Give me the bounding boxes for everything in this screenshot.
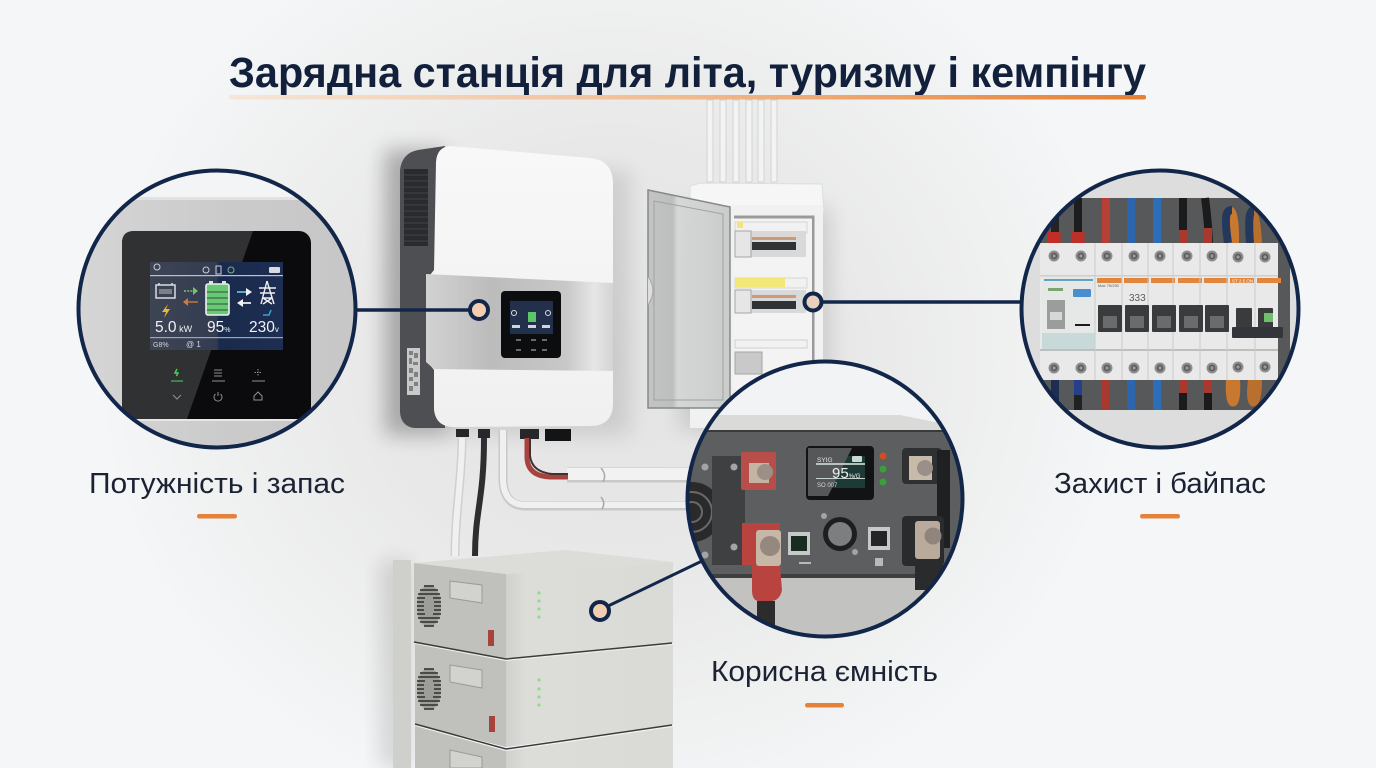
inverter shadow bbox=[385, 150, 445, 435]
breaker row 3 bbox=[735, 340, 807, 374]
voltage reading: 230v bbox=[249, 319, 279, 336]
magnifier: breakers: ST 2.5 ON bbox=[1232, 278, 1253, 284]
inverter white body bbox=[426, 146, 613, 427]
solar input icon bbox=[156, 283, 175, 298]
breaker labels: Max 75/250 bbox=[1098, 283, 1120, 288]
status line: G8% bbox=[153, 342, 169, 349]
label: power and reserve: Потужність і запас bbox=[89, 468, 345, 500]
hybrid inverter bbox=[385, 146, 630, 441]
positive terminal bottom with red cable bbox=[742, 523, 782, 625]
battery module 1 bbox=[414, 562, 673, 658]
wall bracket bbox=[393, 560, 411, 768]
display bezel bbox=[122, 231, 311, 419]
state of charge battery bbox=[206, 281, 229, 315]
magnifier: breakers: 333 bbox=[1129, 293, 1146, 304]
label: protection and bypass: Захист і байпас bbox=[1054, 468, 1266, 500]
title underline bbox=[229, 95, 1146, 100]
power reading: 5.0 kW bbox=[155, 319, 193, 336]
terminal screws bbox=[1048, 250, 1270, 374]
QR label bbox=[407, 348, 420, 395]
battery module 3 bbox=[415, 726, 673, 768]
round fan port bbox=[823, 517, 857, 551]
marker dot: power bbox=[470, 301, 488, 319]
accent dash: protection bbox=[1140, 514, 1180, 518]
RCD module bbox=[1042, 277, 1095, 349]
silver band bbox=[426, 274, 613, 371]
battery shadow bbox=[380, 560, 410, 768]
grid arrow bbox=[263, 310, 271, 315]
battery stack bbox=[380, 550, 673, 768]
wires bbox=[1054, 198, 1258, 410]
charge reading: 95% bbox=[207, 319, 230, 336]
positive terminal top bbox=[741, 452, 776, 490]
board top cap bbox=[690, 183, 824, 212]
cables and pipes bbox=[455, 430, 700, 556]
fan bbox=[690, 482, 712, 542]
connector line: protection bbox=[820, 300, 1022, 304]
battery LCD footer: SO 007 bbox=[817, 483, 838, 489]
grid pylon bbox=[259, 281, 276, 304]
connector line: power bbox=[355, 308, 472, 312]
battery LCD bbox=[806, 446, 874, 500]
negative terminal top bbox=[902, 448, 950, 548]
label: usable capacity: Корисна ємність bbox=[711, 656, 938, 688]
magnifier: battery terminals bbox=[686, 360, 964, 638]
breaker row 2 bbox=[735, 278, 807, 313]
breaker handles bbox=[1098, 305, 1283, 338]
marker dot: capacity bbox=[591, 602, 609, 620]
ethernet port right bbox=[868, 527, 890, 550]
battery LCD header: SYIG bbox=[817, 457, 833, 464]
inverter bottom glands bbox=[456, 429, 571, 441]
battery LCD reading: 95%/G bbox=[832, 465, 861, 482]
status LEDs bbox=[880, 452, 886, 486]
connector line: capacity bbox=[606, 561, 702, 607]
negative terminal bottom bbox=[902, 516, 945, 590]
lightning bolt bbox=[162, 304, 170, 318]
breaker row 1 bbox=[735, 222, 807, 257]
battery top surface bbox=[414, 550, 673, 574]
board body bbox=[690, 205, 823, 428]
open door bbox=[648, 190, 730, 408]
touch buttons bbox=[171, 369, 265, 401]
vent grille bbox=[404, 169, 428, 246]
LCD panel bbox=[150, 262, 283, 350]
magnifier: breakers bbox=[1022, 170, 1298, 448]
accent dash: power bbox=[197, 514, 237, 518]
inverter dark housing bbox=[400, 146, 445, 428]
conduits above distribution board bbox=[707, 100, 777, 182]
network status: @ 1 bbox=[186, 340, 201, 349]
flow arrows right bbox=[237, 291, 247, 293]
dividers and orange strips bbox=[1097, 278, 1281, 283]
battery module 2 bbox=[415, 644, 673, 747]
accent dash: capacity bbox=[805, 703, 844, 708]
magnifier: inverter display bbox=[70, 170, 370, 457]
title: Зарядна станція для літа, туризму і кемпінгу bbox=[229, 49, 1146, 97]
terminal plate left bbox=[712, 456, 745, 565]
inverter screen bbox=[501, 291, 561, 358]
marker dot: protection bbox=[804, 294, 822, 310]
ethernet port left bbox=[788, 532, 810, 555]
status icons bbox=[154, 264, 234, 274]
breaker rail bbox=[1040, 243, 1278, 380]
flow arrows left bbox=[184, 290, 192, 292]
distribution board bbox=[648, 183, 830, 430]
